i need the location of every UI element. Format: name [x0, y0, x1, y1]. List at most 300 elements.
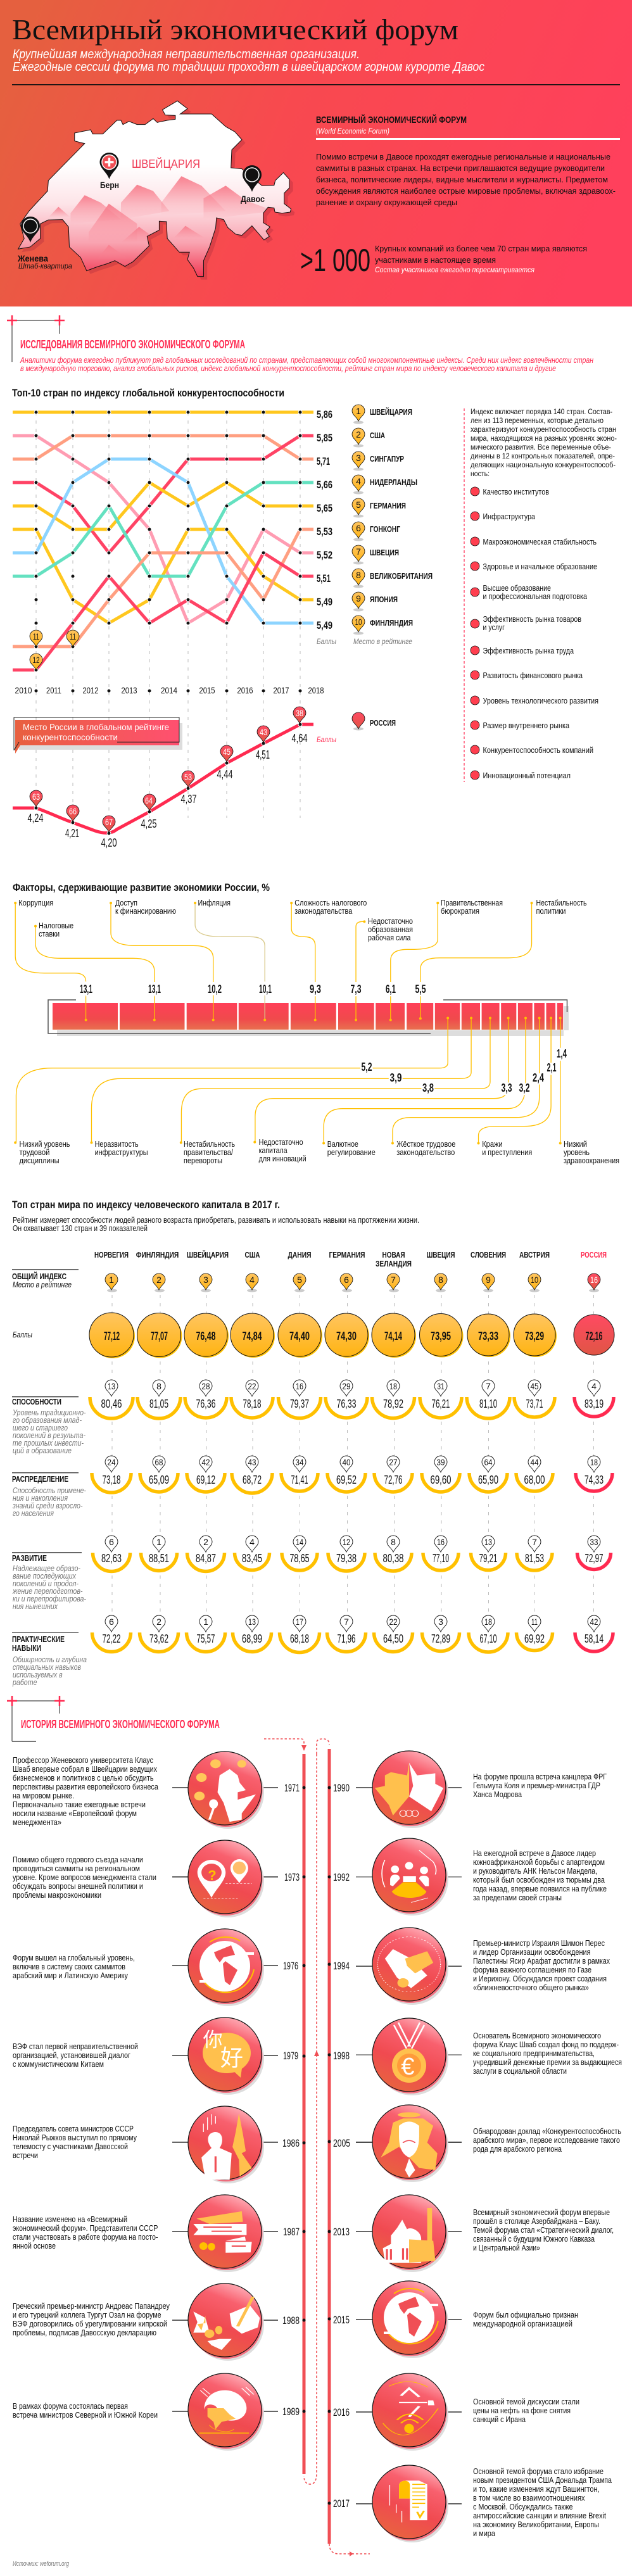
- country headers: США: [244, 1250, 260, 1260]
- subtitle: Крупнейшая международная неправительственная организация.: [13, 47, 360, 61]
- row: deployment: 64: [484, 1457, 493, 1467]
- values: 2,1: [547, 1061, 556, 1074]
- section heading: research: ИССЛЕДОВАНИЯ ВСЕМИРНОГО ЭКОНОМИЧЕСКОГО ФОРУМА: [20, 338, 245, 351]
- country legend: 7: [356, 546, 361, 557]
- score values: 5,66: [317, 479, 332, 491]
- medal: 2016: санкций с Ирана: [473, 2415, 526, 2424]
- row: development: 82,63: [101, 1552, 122, 1565]
- row: overall index: 10: [531, 1275, 538, 1285]
- row: deployment: РАСПРЕДЕЛЕНИЕ: [12, 1474, 68, 1484]
- medal: 1971: 1971: [284, 1782, 300, 1794]
- row: deployment: 34: [295, 1457, 304, 1467]
- row: overall index: 2: [156, 1275, 161, 1285]
- row: capacity: 73,71: [526, 1398, 543, 1410]
- year axis: 2018: [308, 685, 324, 695]
- score labels: 4,25: [141, 818, 157, 830]
- pillar labels: Макроэкономическая стабильность: [483, 537, 597, 546]
- score values: 5,53: [317, 526, 332, 538]
- pillar labels: Здоровье и начальное образование: [483, 562, 597, 571]
- pillar bullets: [471, 487, 479, 780]
- year axis: [15, 685, 324, 695]
- row: capacity: 8: [156, 1381, 161, 1391]
- medal: 1988: проблемы, подписав Давосскую декларацию: [13, 2328, 156, 2337]
- row: know-how: 42: [590, 1617, 598, 1627]
- score values: 5,51: [317, 572, 331, 584]
- medal: 2005: рода для арабского региона: [473, 2144, 562, 2154]
- medal: 1971: менеджмента»: [13, 1817, 61, 1827]
- row: scores: Баллы: [13, 1330, 32, 1339]
- year axis: 2010: [15, 685, 32, 695]
- country legend: 8: [356, 570, 361, 580]
- chart title: constraining factors: Факторы, сдерживающие развитие экономики России, %: [13, 881, 270, 893]
- score labels: 4,64: [291, 732, 308, 745]
- top factor labels: законодательства: [294, 906, 353, 916]
- row: development: 7: [532, 1537, 537, 1547]
- row: development: 14: [296, 1537, 303, 1547]
- row: development: 6: [109, 1537, 114, 1547]
- medal: 1994: «ближневосточного общего рынка»: [473, 1983, 589, 1992]
- score labels: 4,21: [65, 827, 79, 840]
- row: deployment: 69,12: [196, 1474, 215, 1486]
- medal: 2017: [333, 2465, 612, 2542]
- bottom factor labels: Жёсткое трудовое: [396, 1139, 455, 1149]
- row: capacity: 83,19: [585, 1398, 604, 1410]
- country headers: РОССИЯ: [581, 1250, 607, 1260]
- medal: 1971: Первоначально такие ежегодные встречи: [13, 1800, 146, 1809]
- row: know-how: ПРАКТИЧЕСКИЕ: [12, 1634, 65, 1644]
- rank pins: 64: [145, 795, 153, 805]
- score values: 5,52: [317, 549, 332, 561]
- medal: 1976: включив в систему своих саммитов: [13, 1962, 125, 1971]
- row: deployment: 24: [108, 1457, 116, 1467]
- medal: 2013: связанный с будущим Южного Кавказа: [473, 2234, 595, 2244]
- panel: index description and pillars: [464, 407, 617, 782]
- rank pins: [30, 707, 306, 832]
- medal: 2016: Основной темой дискуссии стали: [473, 2397, 579, 2406]
- country legend: РОССИЯ: [370, 718, 396, 728]
- row: know-how: 1: [203, 1617, 208, 1627]
- medal: 1971: перспективы развития европейского бизнеса: [13, 1782, 159, 1791]
- medal: 1998: заслуги в социальной области: [473, 2066, 567, 2076]
- bottom factor labels: Неразвитость: [95, 1139, 139, 1149]
- top factor labels: Недостаточно: [368, 916, 413, 926]
- forum description: саммиты в разных странах. На встречи приглашаются ведущие руководители: [316, 163, 605, 173]
- row: development: 13: [484, 1537, 492, 1547]
- row: know-how: Обширность и глубина: [13, 1655, 87, 1664]
- row: development: 16: [437, 1537, 445, 1547]
- forum description: ранение и охрану окружающей среды: [316, 198, 457, 207]
- stat: over 1000 companies: Крупных компаний из более чем 70 стран мира являются: [375, 244, 587, 253]
- row: know-how: 64,50: [383, 1632, 403, 1645]
- medal: 1988: Греческий премьер-министр Андреас Папандреу: [13, 2301, 170, 2311]
- panel: index description and pillars: лен из 113 переменных, которые детально: [471, 416, 604, 425]
- row: capacity: 81,05: [149, 1398, 168, 1410]
- row: scores: 72,16: [585, 1330, 603, 1342]
- medal: 2013: 2013: [333, 2226, 350, 2238]
- rank pins: 66: [69, 806, 77, 816]
- factors bar chart: [15, 898, 619, 1165]
- row: know-how: 13: [248, 1617, 256, 1627]
- subtitle: Ежегодные сессии форума по традиции проходят в швейцарском горном курорте Давос: [13, 60, 484, 74]
- medal: 1992: года назад, впервые появился на публике: [473, 1884, 607, 1893]
- row: know-how: 2: [156, 1617, 161, 1627]
- values: 13,1: [80, 983, 92, 995]
- row: deployment: 69,52: [336, 1474, 357, 1486]
- medal: 1986: Председатель совета министров СССР: [13, 2124, 134, 2133]
- row: deployment: 68,72: [243, 1474, 262, 1486]
- country headers: ФИНЛЯНДИЯ: [136, 1250, 179, 1260]
- row: capacity: го образования млад-: [13, 1415, 82, 1425]
- medal: 2013: [333, 2195, 614, 2272]
- row: scores: 76,48: [196, 1330, 215, 1342]
- row: development: РАЗВИТИЕ: [12, 1553, 47, 1563]
- pillar labels: Эффективность рынка товаров: [483, 614, 581, 624]
- score values: [317, 408, 332, 631]
- pillar labels: и профессиональная подготовка: [483, 591, 588, 601]
- row: know-how: 72,89: [431, 1632, 450, 1645]
- panel: index description and pillars: ность:: [471, 469, 490, 478]
- row: overall index: 6: [344, 1275, 349, 1285]
- year axis: 2012: [82, 685, 99, 695]
- values: 3,9: [390, 1071, 401, 1084]
- values: [80, 983, 567, 1094]
- row: know-how: 6: [109, 1617, 114, 1627]
- pillar labels: Уровень технологического развития: [483, 696, 598, 705]
- year axis: 2017: [274, 685, 289, 695]
- pillar labels: Эффективность рынка труда: [483, 646, 574, 655]
- country legend: Место в рейтинге: [353, 637, 412, 646]
- row: development: 72,97: [585, 1552, 603, 1565]
- year axis: 2015: [199, 685, 215, 695]
- row: development: 4: [250, 1537, 255, 1547]
- row: development: жение переподготов-: [12, 1586, 83, 1596]
- medal: 1979: с коммунистическим Китаем: [13, 2059, 104, 2069]
- row: deployment: 71,41: [291, 1474, 308, 1486]
- medal: 1973: проблемы макроэкономики: [13, 1890, 101, 1900]
- bottom factor labels: Нестабильность: [184, 1139, 235, 1149]
- medal: 1979: [13, 2017, 298, 2095]
- bottom factor labels: Низкий: [564, 1139, 587, 1149]
- bottom factor labels: Валютное: [327, 1139, 358, 1149]
- medal: 1979: 1979: [283, 2050, 298, 2062]
- bottom factor labels: правительства/: [184, 1147, 233, 1157]
- bottom factor labels: перевороты: [184, 1156, 222, 1165]
- pin: Geneva: Женева: [17, 253, 48, 263]
- pin: Bern: [100, 153, 119, 190]
- early rank pins: [30, 630, 79, 670]
- country headers: СЛОВЕНИЯ: [471, 1250, 506, 1260]
- row: capacity: 4: [591, 1381, 597, 1391]
- top factor labels: Инфляция: [198, 898, 231, 907]
- row: overall index: 9: [486, 1275, 491, 1285]
- row: scores: 73,33: [478, 1330, 498, 1342]
- pin: Geneva: [17, 217, 72, 270]
- country legend: 5: [356, 500, 361, 510]
- country legend: США: [370, 431, 385, 440]
- row: capacity: ций в образование: [13, 1446, 72, 1455]
- row: overall index: 16: [590, 1275, 598, 1285]
- row: overall index: 4: [250, 1275, 255, 1285]
- medal: 2015: международной организацией: [473, 2319, 572, 2328]
- row: capacity: 16: [296, 1381, 303, 1391]
- values: 7,3: [351, 983, 361, 995]
- medal: 1998: ке социального предпринимательства,: [473, 2049, 595, 2058]
- medal: 2015: 2015: [333, 2314, 350, 2326]
- bottom factor labels: уровень: [564, 1147, 590, 1157]
- row: know-how: специальных навыков: [13, 1662, 81, 1672]
- medal: 1971: бизнесменов и политиков с целью обсудить: [13, 1773, 154, 1783]
- row: deployment: го населения: [13, 1508, 54, 1518]
- medal: 1971: [13, 1752, 300, 1829]
- top factor labels: к финансированию: [115, 906, 176, 916]
- row: deployment: 27: [389, 1457, 398, 1467]
- row: scores: 77,12: [104, 1330, 120, 1342]
- medal: 1971: на мировом рынке.: [13, 1791, 74, 1800]
- medal: 1992: и руководитель АНК Нельсон Мандела,: [473, 1866, 597, 1876]
- medal: 1989: [13, 2373, 300, 2451]
- country legend: 3: [356, 453, 361, 463]
- medal: 1986: Николай Рыжков выступил по прямому: [13, 2133, 137, 2142]
- row: capacity: Уровень традиционно-: [12, 1408, 86, 1417]
- forum description: [316, 114, 620, 207]
- country legend: ФИНЛЯНДИЯ: [370, 618, 413, 628]
- medal: 1973: уровне. Кроме вопросов менеджмента стали: [13, 1872, 156, 1882]
- section heading: history: ИСТОРИЯ ВСЕМИРНОГО ЭКОНОМИЧЕСКОГО ФОРУМА: [21, 1718, 220, 1731]
- section heading: history: [7, 1696, 220, 1741]
- rank pins: 53: [184, 772, 192, 782]
- pillar labels: Инновационный потенциал: [483, 771, 571, 780]
- Russia rank line chart: Баллы: [317, 735, 336, 744]
- row: deployment: 69,60: [431, 1474, 451, 1486]
- row: know-how: 22: [389, 1617, 398, 1627]
- row: capacity: 78,92: [383, 1398, 403, 1410]
- bottom factor labels: законодательство: [396, 1147, 455, 1157]
- row: deployment: 73,18: [103, 1474, 120, 1486]
- score labels: 4,20: [101, 837, 117, 849]
- country legend: ЯПОНИЯ: [370, 595, 398, 604]
- row: know-how: 58,14: [585, 1632, 604, 1645]
- score labels: 4,51: [256, 748, 270, 761]
- medal: 2017: антироссийские санкции и влияние Brexit: [473, 2511, 606, 2520]
- top factor labels: бюрократия: [441, 906, 479, 916]
- row: capacity: 18: [389, 1381, 397, 1391]
- row: know-how: 7: [344, 1617, 349, 1627]
- row: know-how: 71,96: [337, 1632, 356, 1645]
- values: 5,2: [361, 1061, 372, 1073]
- title: Всемирный экономический форум: [12, 13, 458, 46]
- bottom factor labels: дисциплины: [19, 1156, 60, 1165]
- score values: 5,71: [317, 455, 330, 467]
- bottom factor labels: Низкий уровень: [19, 1139, 70, 1149]
- medal: 1989: В рамках форума состоялась первая: [13, 2401, 128, 2411]
- medal: 1976: [13, 1929, 298, 2006]
- row: development: поколений и продол-: [13, 1579, 79, 1588]
- rank pins: 43: [260, 727, 267, 737]
- country legend: 1: [356, 406, 361, 416]
- row: capacity: 76,33: [337, 1398, 356, 1410]
- medal: 1992: На ежегодной встрече в Давосе лидер: [473, 1848, 596, 1858]
- values: 6,1: [386, 983, 396, 995]
- bottom factor labels: для инноваций: [259, 1154, 307, 1163]
- row: capacity: СПОСОБНОСТИ: [12, 1397, 61, 1406]
- row: deployment: 39: [437, 1457, 445, 1467]
- medal: 2017: 2017: [333, 2497, 350, 2510]
- medal: 1988: ВЭФ договорились об урегулировании кипрской: [13, 2319, 167, 2328]
- row: overall index: 3: [203, 1275, 208, 1285]
- medal: 1979: 好: [220, 2040, 243, 2073]
- header panel: [0, 0, 632, 306]
- row: development: 78,65: [290, 1552, 309, 1565]
- pin: Geneva: Штаб-квартира: [18, 262, 72, 270]
- row: deployment: 18: [590, 1457, 598, 1467]
- row: scores: 73,95: [431, 1330, 451, 1342]
- row: capacity: 22: [248, 1381, 256, 1391]
- row: development: [12, 1536, 610, 1611]
- row: capacity: 76,36: [196, 1398, 215, 1410]
- row: know-how: 11: [531, 1617, 538, 1627]
- row: deployment: Способность примене-: [13, 1486, 87, 1495]
- country legend: СИНГАПУР: [370, 454, 404, 464]
- medal: 2016: цены на нефть на фоне снятия: [473, 2406, 571, 2415]
- panel: index description and pillars: мира, находящихся на разных уровнях эконо-: [471, 434, 617, 443]
- row: capacity: [12, 1380, 614, 1455]
- row: deployment: 68: [155, 1457, 163, 1467]
- medal: 1989: 1989: [282, 2406, 300, 2418]
- top factor labels: рабочая сила: [368, 933, 411, 942]
- country headers: АВСТРИЯ: [519, 1250, 550, 1260]
- values: 9,3: [310, 983, 321, 995]
- row: overall index: 8: [438, 1275, 443, 1285]
- bottom factor labels: регулирование: [327, 1147, 376, 1157]
- medal: 1988: [13, 2283, 300, 2361]
- medal: 1987: Название изменено на «Всемирный: [13, 2214, 127, 2224]
- row: deployment: ния и накопления: [13, 1493, 68, 1503]
- country headers: ДАНИЯ: [288, 1250, 312, 1260]
- medal: 1994: и Иерихону. Обсуждался проект создания: [473, 1974, 607, 1983]
- row: deployment: 44: [531, 1457, 539, 1467]
- chart title: top-10: Топ-10 стран по индексу глобальной конкурентоспособности: [12, 387, 284, 399]
- chart title: human capital: Топ стран мира по индексу человеческого капитала в 2017 г.: [12, 1199, 280, 1211]
- row: development: 79,21: [479, 1552, 498, 1565]
- row: deployment: знаний среди взросло-: [12, 1501, 83, 1510]
- medal: 1992: южноафриканской борьбы с апартеидом: [473, 1857, 605, 1867]
- medal: 1992: за пределами своей страны: [473, 1893, 562, 1902]
- country legend: НИДЕРЛАНДЫ: [370, 477, 417, 487]
- row: overall index: 7: [391, 1275, 396, 1285]
- row: development: 1: [156, 1537, 161, 1547]
- row: scores: 74,14: [384, 1330, 402, 1342]
- pillar labels: Размер внутреннего рынка: [483, 721, 570, 730]
- year axis: 2016: [237, 685, 253, 695]
- country legend: [317, 405, 433, 731]
- medal: 1990: 1990: [333, 1782, 350, 1794]
- country legend: 2: [356, 429, 361, 439]
- medal: 1987: стали участвовать в работе форума на посто-: [13, 2232, 158, 2242]
- medal: 1976: 1976: [283, 1960, 298, 1972]
- medal: 1998: Основатель Всемирного экономического: [473, 2031, 601, 2040]
- row: know-how: НАВЫКИ: [12, 1643, 41, 1653]
- country legend: 9: [356, 593, 361, 603]
- year axis: 2014: [161, 685, 177, 695]
- country headers: ГЕРМАНИЯ: [329, 1250, 365, 1260]
- row: development: 79,38: [336, 1552, 357, 1565]
- row: development: 33: [590, 1537, 598, 1547]
- row: know-how: 68,99: [242, 1632, 262, 1645]
- country legend: 4: [356, 476, 361, 486]
- bottom factor labels: трудовой: [19, 1147, 49, 1157]
- country headers: НОРВЕГИЯ: [94, 1250, 129, 1260]
- row: scores: 74,40: [289, 1330, 310, 1342]
- row: know-how: 69,92: [524, 1632, 545, 1645]
- forum description: ВСЕМИРНЫЙ ЭКОНОМИЧЕСКИЙ ФОРУМ: [316, 114, 467, 125]
- row: scores: 77,07: [151, 1330, 168, 1342]
- country legend: ШВЕЙЦАРИЯ: [370, 407, 412, 417]
- values: 10,2: [208, 983, 222, 995]
- row: know-how: 18: [484, 1617, 492, 1627]
- medal: 2015: [333, 2281, 578, 2358]
- forum description: бизнеса, политические лидеры, видные мыслители и журналисты. Предметом: [316, 175, 608, 184]
- row: deployment: 74,33: [585, 1474, 604, 1486]
- score values: 5,85: [317, 432, 332, 444]
- year axis: 2013: [122, 685, 137, 695]
- rank pins: 45: [223, 747, 231, 757]
- medal: 1998: 1998: [333, 2050, 350, 2062]
- values: 13,1: [148, 983, 161, 995]
- early rank pins: 11: [70, 631, 76, 641]
- panel: index description and pillars: динены в 12 контрольных показателей, опре-: [471, 451, 615, 460]
- row: scores: 74,84: [242, 1330, 262, 1342]
- values: 5,5: [415, 983, 426, 995]
- row: capacity: те прошлых инвести-: [13, 1438, 84, 1448]
- medal: 1976: арабский мир и Латинскую Америку: [13, 1971, 128, 1980]
- top factor labels: образованная: [368, 925, 413, 934]
- row: know-how: 17: [296, 1617, 303, 1627]
- medal: 1994: Премьер-министр Израиля Шимон Перес: [473, 1938, 605, 1948]
- row: overall index: 1: [109, 1275, 114, 1285]
- row: development: 2: [203, 1537, 208, 1547]
- row: overall index: [12, 1269, 600, 1292]
- early rank pins: 12: [33, 655, 40, 665]
- medal: 1971: Профессор Женевского университета Клаус: [13, 1755, 153, 1765]
- country legend: ГОНКОНГ: [370, 524, 400, 534]
- medal: 1979: ВЭФ стал первой неправительственной: [13, 2042, 138, 2051]
- early rank pins: 11: [33, 631, 39, 641]
- medal: 2016: [333, 2373, 579, 2451]
- medal: 2017: и то, какие изменения ждут Вашингтон,: [473, 2484, 599, 2494]
- callout: Russia place: Место России в глобальном рейтинге: [23, 722, 169, 732]
- country legend: 6: [356, 523, 361, 533]
- values: 3,8: [422, 1082, 434, 1094]
- row: development: 84,87: [196, 1552, 216, 1565]
- callout: Russia place: [14, 717, 182, 754]
- top factor labels: Нестабильность: [536, 898, 587, 907]
- medal: 1973: обсуждать вопросы внешней политики и: [13, 1881, 143, 1891]
- medal: 1992: [333, 1838, 607, 1916]
- medal: 1986: [13, 2106, 300, 2183]
- medal: 1994: форума важного соглашения по Газе: [473, 1965, 591, 1974]
- medal: 2005: [333, 2105, 621, 2182]
- score labels: [28, 732, 308, 849]
- country label: ШВЕЙЦАРИЯ: [132, 157, 200, 170]
- medal: 1973: ?: [208, 1867, 217, 1883]
- row: deployment: 68,00: [524, 1474, 545, 1486]
- row: capacity: 81,10: [479, 1398, 497, 1410]
- year axis: 2011: [46, 685, 61, 695]
- medal: 1987: [13, 2195, 300, 2272]
- country legend: ВЕЛИКОБРИТАНИЯ: [370, 571, 433, 581]
- row: capacity: 76,21: [432, 1398, 450, 1410]
- score values: 5,65: [317, 502, 332, 514]
